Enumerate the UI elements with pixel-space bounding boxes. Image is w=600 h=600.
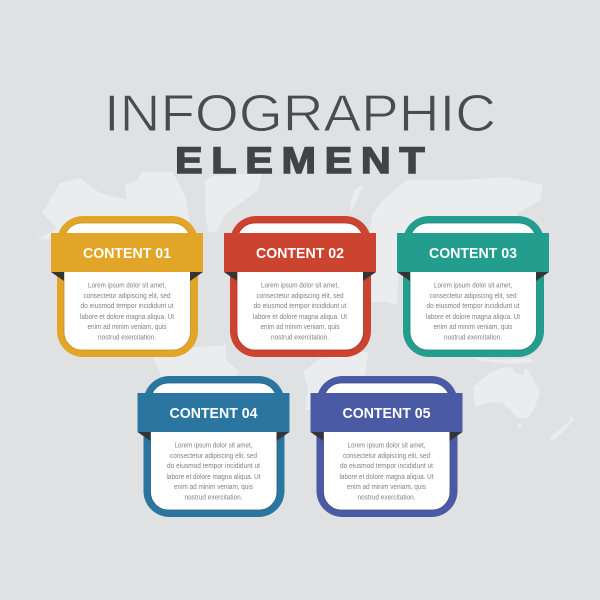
- body text: labore et dolore magna aliqua. Ut: [166, 472, 261, 481]
- ribbon heading: [224, 233, 376, 272]
- body text: consectetur adipiscing elit, sed: [170, 451, 257, 460]
- body text: Lorem ipsum dolor sit amet,: [348, 440, 426, 450]
- body text: nostrud exercitation.: [271, 332, 329, 342]
- body text: [340, 440, 434, 502]
- body text: enim ad minim veniam, quis: [347, 482, 426, 491]
- body text: do eiusmod tempor incididunt ut: [254, 301, 347, 310]
- panel: content 02: [224, 216, 376, 357]
- body text: do eiusmod tempor incididunt ut: [426, 301, 520, 310]
- ribbon corners: [397, 272, 549, 281]
- body text: labore et dolore magna aliqua. Ut: [340, 472, 434, 481]
- body text: consectetur adipiscing elit, sed: [343, 451, 430, 460]
- panel: content 01: [51, 216, 203, 357]
- subtitle: ELEMENT: [175, 140, 425, 181]
- body text: Lorem ipsum dolor sit amet,: [174, 440, 252, 450]
- ribbon heading: [138, 393, 290, 432]
- ribbon corners: [310, 432, 462, 441]
- body text: enim ad minim veniam, quis: [434, 322, 513, 331]
- body text: do eiusmod tempor incididunt ut: [340, 461, 434, 470]
- body text: nostrud exercitation.: [358, 492, 416, 502]
- panel: content 04: [138, 376, 290, 517]
- panel: content 03: [397, 216, 549, 357]
- body text: enim ad minim veniam, quis: [174, 482, 253, 491]
- body text: labore et dolore magna aliqua. Ut: [253, 312, 348, 321]
- body text: do eiusmod tempor incididunt ut: [80, 301, 174, 310]
- ribbon heading: [51, 233, 203, 272]
- ribbon corners: [51, 272, 203, 281]
- ribbon corners: [138, 432, 290, 441]
- panel: content 05: [310, 376, 462, 517]
- body text: Lorem ipsum dolor sit amet,: [261, 280, 339, 290]
- body text: enim ad minim veniam, quis: [88, 322, 167, 331]
- world map: [38, 172, 574, 442]
- ribbon heading: CONTENT 05: [342, 405, 430, 422]
- body text: enim ad minim veniam, quis: [260, 322, 340, 331]
- body text: [253, 280, 348, 342]
- body text: consectetur adipiscing elit, sed: [430, 291, 516, 300]
- body text: labore et dolore magna aliqua. Ut: [426, 312, 521, 321]
- body text: labore et dolore magna aliqua. Ut: [80, 312, 175, 321]
- body text: nostrud exercitation.: [98, 332, 156, 342]
- body text: [166, 440, 261, 502]
- ribbon heading: [397, 233, 549, 272]
- ribbon heading: CONTENT 03: [429, 245, 517, 262]
- body text: [80, 280, 175, 342]
- body text: nostrud exercitation.: [184, 492, 242, 502]
- body text: do eiusmod tempor incididunt ut: [167, 461, 261, 470]
- body text: [426, 280, 521, 342]
- ribbon heading: [310, 393, 462, 432]
- ribbon corners: [224, 272, 376, 281]
- ribbon heading: CONTENT 01: [83, 245, 171, 262]
- title: INFOGRAPHIC: [104, 85, 496, 143]
- body text: Lorem ipsum dolor sit amet,: [88, 280, 166, 290]
- ribbon heading: CONTENT 04: [170, 405, 258, 422]
- body text: consectetur adipiscing elit, sed: [84, 291, 170, 300]
- body text: nostrud exercitation.: [444, 332, 502, 342]
- body text: Lorem ipsum dolor sit amet,: [434, 280, 512, 290]
- ribbon heading: CONTENT 02: [256, 245, 344, 262]
- body text: consectetur adipiscing elit, sed: [256, 291, 344, 300]
